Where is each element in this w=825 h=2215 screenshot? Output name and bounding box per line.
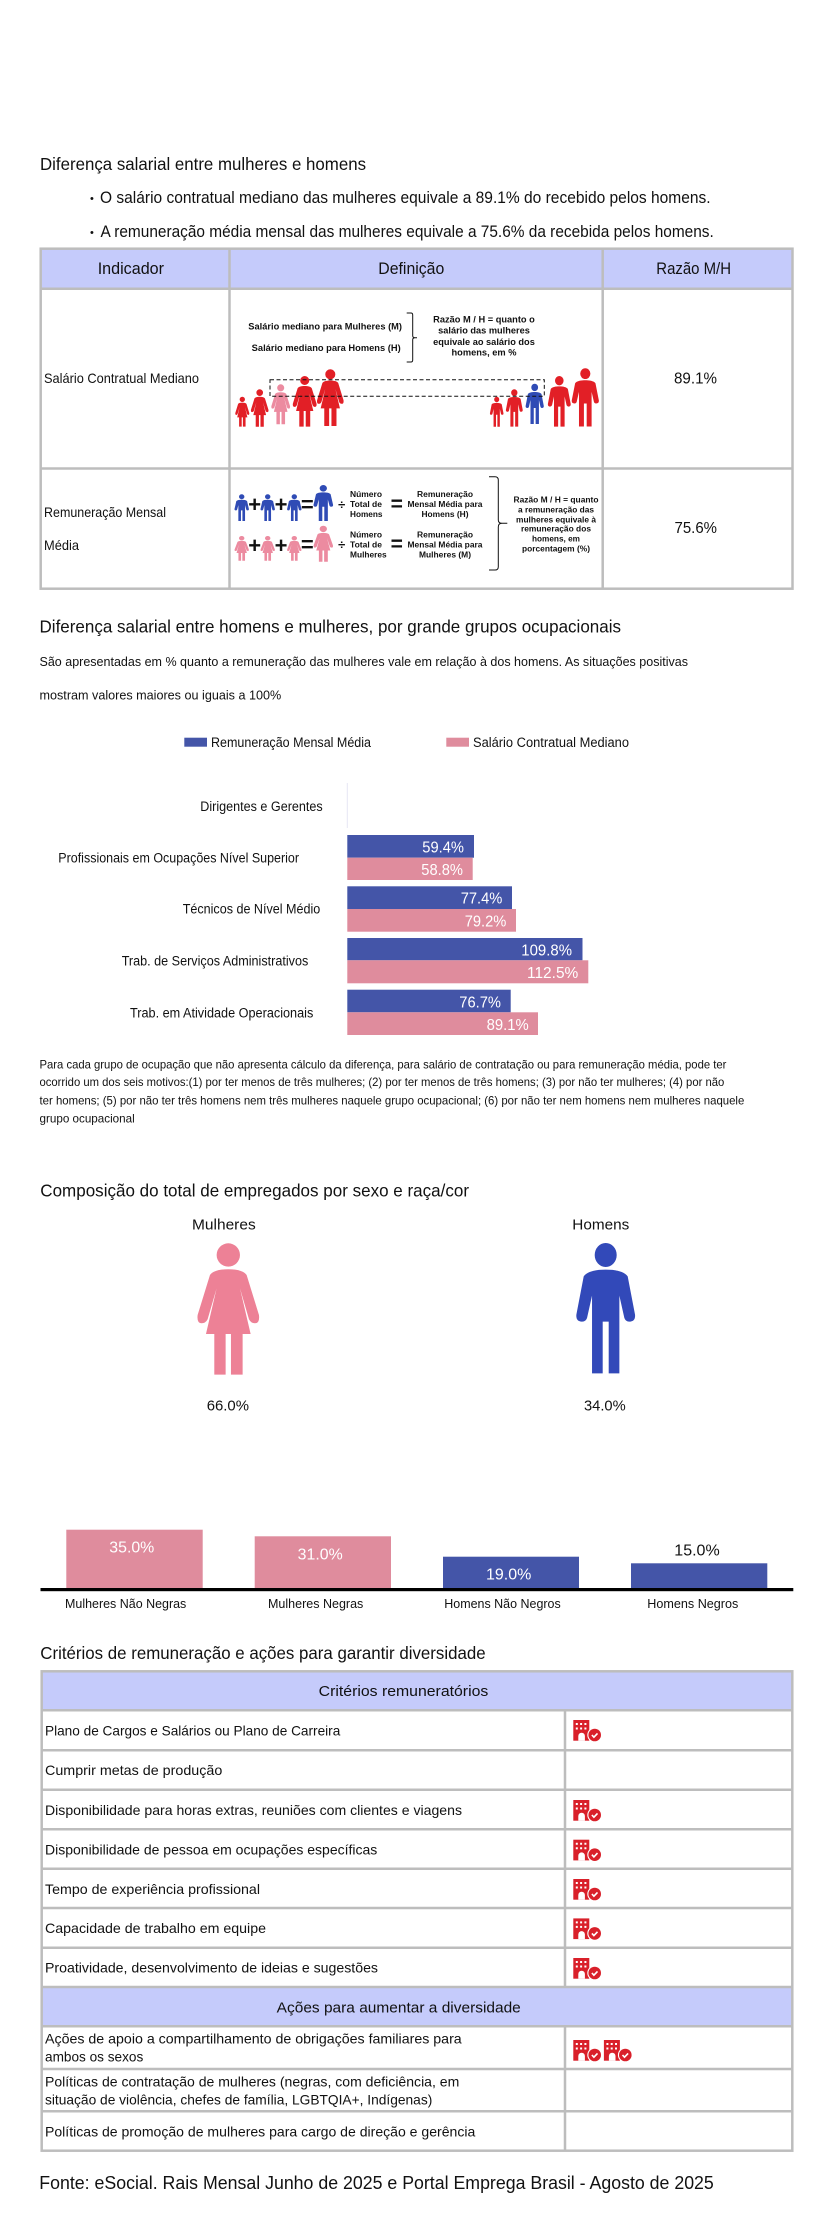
operators: =	[391, 493, 403, 516]
bar chart: composição por raça/cor: Homens Negros	[647, 1596, 739, 1611]
category labels: Técnicos de Nível Médio	[183, 902, 320, 917]
bars: técnicos	[347, 886, 516, 932]
text block: footnote	[40, 1057, 745, 1126]
criteria rows text: Disponibilidade para horas extras, reuniões com clientes e viagens	[45, 1802, 462, 1818]
diagram: salário mediano definition	[235, 313, 599, 427]
icons: men line-up	[490, 368, 599, 427]
bar chart: composição por raça/cor: 35.0%	[109, 1540, 155, 1557]
text block: chart intro	[40, 654, 688, 702]
table header row: Indicador	[98, 259, 164, 278]
bars: técnicos: 79.2%	[465, 914, 507, 931]
bars: técnicos: 77.4%	[461, 891, 503, 908]
diagram: remuneração média definition: Homens	[350, 509, 383, 519]
row label: salário contratual mediano: Salário Contratual Mediano	[44, 370, 199, 386]
bar chart: composição por raça/cor: 31.0%	[298, 1547, 343, 1564]
diagram: remuneração média definition: Remuneração	[417, 530, 473, 540]
criteria rows text: Plano de Cargos e Salários ou Plano de Carreira	[45, 1723, 341, 1739]
criteria rows text	[45, 1723, 462, 1976]
criteria rows text: Capacidade de trabalho em equipe	[45, 1920, 266, 1936]
diagram: remuneração média definition: Razão M / H = quanto	[514, 494, 598, 504]
operators: +	[248, 492, 261, 517]
criteria rows text: Cumprir metas de produção	[45, 1762, 223, 1778]
text block: footnote: ocorrido um dos seis motivos:(1) por ter menos de três mulheres; (2) por ter menos de três homens; (3) por não ter mulheres; (4) por não	[40, 1075, 725, 1089]
bars: profissionais: 58.8%	[421, 862, 463, 879]
diagram: remuneração média definition	[234, 477, 598, 570]
operators: =	[391, 533, 403, 556]
panel: homens: 34.0%	[584, 1398, 626, 1415]
text block: key findings bullets: A remuneração média mensal das mulheres equivale a 75.6% da recebida pelos homens.	[100, 223, 714, 241]
actions rows text: ambos os sexos	[45, 2049, 143, 2065]
panel: homens: Homens	[572, 1217, 629, 1234]
text block: footnote: grupo ocupacional	[40, 1112, 135, 1126]
diagram: salário mediano definition: salário das mulheres	[438, 326, 530, 336]
icons: women line-up	[235, 369, 344, 427]
actions rows text: Políticas de contratação de mulheres (negras, com deficiência, em	[45, 2074, 459, 2090]
section header: critérios remuneratórios: Critérios remuneratórios	[319, 1683, 488, 1700]
operators: +	[275, 492, 287, 517]
panel: mulheres	[192, 1217, 259, 1415]
text block: key findings bullets	[90, 189, 714, 241]
category labels: Dirigentes e Gerentes	[200, 799, 323, 814]
legend: Salário Contratual Mediano	[473, 735, 629, 750]
icon: man	[576, 1243, 635, 1373]
icon: woman	[197, 1243, 259, 1375]
heading: composição do total de empregados: Composição do total de empregados por sexo e raça/cor	[40, 1181, 469, 1201]
operators	[248, 492, 403, 558]
value: razão remuneração média: 75.6%	[674, 520, 717, 537]
actions rows text: Ações de apoio a compartilhamento de obrigações familiares para	[45, 2031, 462, 2047]
operators: =	[301, 532, 314, 557]
category labels: Trab. em Atividade Operacionais	[130, 1005, 314, 1020]
bars: administrativos	[347, 938, 588, 983]
text block: footnote: Para cada grupo de ocupação que não apresenta cálculo da diferença, para salário de contratação ou para remuneração média, pode ter	[40, 1057, 726, 1071]
row label: remuneração mensal média	[44, 504, 166, 553]
legend	[184, 735, 629, 750]
category labels	[58, 799, 323, 1020]
section header: ações para aumentar a diversidade: Ações para aumentar a diversidade	[277, 2000, 521, 2017]
bars: operacionais: 89.1%	[487, 1017, 529, 1034]
bar chart: composição por raça/cor: Homens Não Negros	[444, 1596, 561, 1611]
heading: diferença por grupos ocupacionais: Diferença salarial entre homens e mulheres, por grande grupos ocupacionais	[40, 617, 621, 637]
bar chart: composição por raça/cor: Mulheres Negras	[268, 1596, 364, 1611]
criteria rows text: Tempo de experiência profissional	[45, 1881, 260, 1897]
criteria rows text: Proatividade, desenvolvimento de ideias e sugestões	[45, 1960, 378, 1976]
diagram: remuneração média definition: porcentagem (%)	[522, 543, 590, 553]
legend: Remuneração Mensal Média	[211, 735, 371, 750]
diagram: salário mediano definition: Salário mediano para Homens (H)	[252, 343, 401, 353]
panel: homens	[572, 1217, 635, 1415]
operators: ÷	[338, 497, 345, 512]
diagram: remuneração média definition: Mulheres	[350, 549, 387, 559]
text block: chart intro: São apresentadas em % quanto a remuneração das mulheres vale em relação à dos homens. As situações positivas	[40, 654, 688, 669]
text block: key findings bullets: •	[90, 193, 94, 205]
bars: administrativos: 112.5%	[527, 965, 579, 982]
diagram: remuneração média definition: Total de	[350, 539, 382, 549]
row label: remuneração mensal média: Remuneração Mensal	[44, 504, 166, 520]
operators: =	[301, 492, 314, 517]
diagram: remuneração média definition: Número	[350, 489, 382, 499]
category labels: Trab. de Serviços Administrativos	[122, 953, 309, 968]
bars: operacionais	[347, 990, 538, 1035]
category labels: Profissionais em Ocupações Nível Superior	[58, 850, 299, 865]
diagram: salário mediano definition: homens, em %	[452, 348, 516, 358]
bar chart: diferença por grupo ocupacional	[58, 783, 588, 1035]
row label: remuneração mensal média: Média	[44, 537, 79, 553]
panel: mulheres: Mulheres	[192, 1217, 256, 1234]
icons: women sum	[235, 526, 333, 562]
diagram: remuneração média definition: Mensal Média para	[408, 499, 483, 509]
table header row: Razão M/H	[656, 259, 731, 278]
diagram: remuneração média definition: mulheres equivale à	[516, 514, 596, 524]
diagram: salário mediano definition: Razão M / H = quanto o	[433, 315, 535, 325]
panel: critérios e ações table	[42, 1671, 792, 2151]
heading: diferença salarial entre mulheres e homens: Diferença salarial entre mulheres e homens	[40, 154, 366, 174]
bars: profissionais: 59.4%	[422, 839, 464, 856]
text block: footnote: ter homens; (5) por não ter três homens nem três mulheres naquele grupo ocupacional; (6) por não ter nem homens nem mulheres naquele	[40, 1093, 745, 1107]
bar chart: composição por raça/cor	[40, 1530, 793, 1611]
actions rows text: situação de violência, chefes de família, LGBTQIA+, Indígenas)	[45, 2092, 432, 2108]
diagram: remuneração média definition: Homens (H)	[422, 509, 469, 519]
actions rows text	[45, 2031, 476, 2139]
diagram: remuneração média definition: a remuneração das	[518, 504, 594, 514]
icons: building check marks	[573, 1720, 633, 2062]
diagram: salário mediano definition: Salário mediano para Mulheres (M)	[248, 321, 402, 331]
bars: profissionais	[347, 835, 474, 880]
icons: men sum	[234, 485, 333, 521]
table header row	[41, 249, 792, 289]
panel: mulheres: 66.0%	[207, 1398, 249, 1415]
diagram: remuneração média definition: Remuneração	[417, 489, 473, 499]
bars: operacionais: 76.7%	[459, 994, 501, 1011]
operators: +	[275, 533, 287, 558]
diagram: remuneração média definition: Mulheres (M)	[419, 549, 471, 559]
value: razão salário contratual: 89.1%	[674, 370, 717, 388]
actions rows text: Políticas de promoção de mulheres para cargo de direção e gerência	[45, 2123, 476, 2139]
source note: Fonte: eSocial. Rais Mensal Junho de 2025 e Portal Emprega Brasil - Agosto de 2025	[39, 2172, 714, 2193]
diagram: remuneração média definition: Número	[350, 530, 382, 540]
bars: administrativos: 109.8%	[521, 942, 572, 959]
diagram: remuneração média definition: Mensal Média para	[408, 539, 483, 549]
diagram: salário mediano definition: equivale ao salário dos	[433, 337, 535, 347]
operators: +	[248, 533, 261, 558]
bar chart: composição por raça/cor: 19.0%	[486, 1566, 532, 1583]
criteria rows text: Disponibilidade de pessoa em ocupações específicas	[45, 1841, 377, 1857]
heading: critérios de remuneração: Critérios de remuneração e ações para garantir diversidade	[40, 1643, 486, 1663]
diagram: remuneração média definition: Total de	[350, 499, 382, 509]
panel: indicator definitions table	[41, 249, 792, 589]
table header row: Definição	[378, 259, 444, 278]
text block: key findings bullets: •	[90, 227, 94, 239]
diagram: remuneração média definition: homens, em	[532, 533, 580, 543]
operators: ÷	[338, 537, 345, 552]
text block: chart intro: mostram valores maiores ou iguais a 100%	[40, 687, 282, 702]
diagram: remuneração média definition: remuneração dos	[521, 524, 591, 534]
bar chart: composição por raça/cor: Mulheres Não Negras	[65, 1596, 187, 1611]
text block: key findings bullets: O salário contratual mediano das mulheres equivale a 89.1% do recebido pelos homens.	[100, 189, 711, 207]
bar chart: composição por raça/cor: 15.0%	[674, 1543, 720, 1560]
